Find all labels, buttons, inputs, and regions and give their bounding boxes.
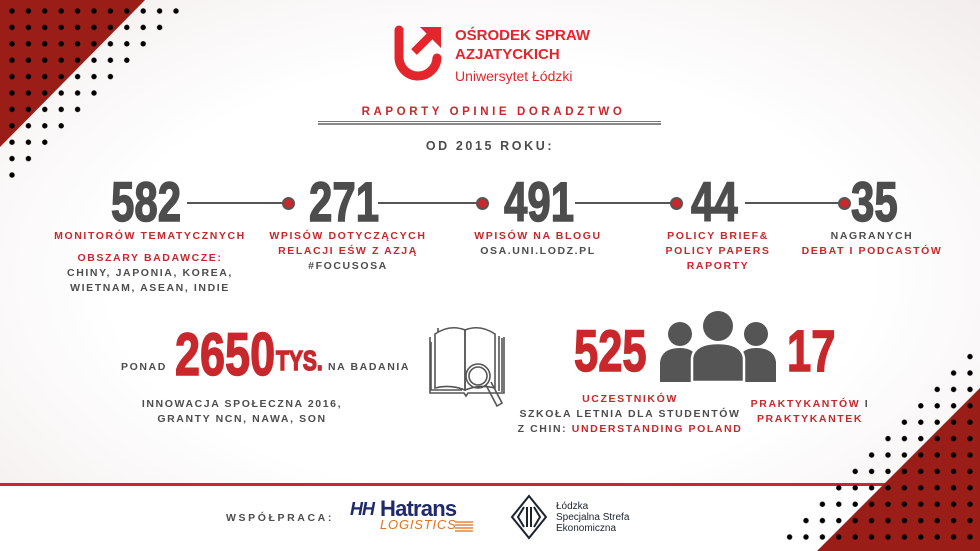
text: grants: GRANTY NCN, NAWA, SON (157, 413, 327, 425)
label 491: OSA.UNI.LODZ.PL (480, 245, 596, 257)
stat 491: 491 (504, 170, 574, 233)
logo text (455, 26, 590, 63)
label 44: POLICY BRIEF& (667, 230, 769, 242)
logo: Hatrans: LOGISTICS (380, 517, 457, 532)
icon: people (660, 311, 776, 382)
label 271: RELACJI EŚW Z AZJĄ (278, 245, 418, 257)
heading: since 2015: OD 2015 ROKU: (426, 139, 554, 153)
label 491 (474, 230, 602, 257)
text: grants: INNOWACJA SPOŁECZNA 2016, (142, 398, 342, 410)
stat 2650: 2650 (175, 321, 275, 388)
label 582: CHINY, JAPONIA, KOREA, (67, 267, 233, 279)
footer: cooperation: WSPÓŁPRACA: (226, 512, 334, 524)
label 35: DEBAT I PODCASTÓW (802, 245, 942, 257)
stat 582: 582 (111, 170, 181, 233)
logo: ŁSSE: Ekonomiczna (556, 523, 616, 534)
logo text: OŚRODEK SPRAW (455, 27, 590, 44)
logo: Hatrans: HH (350, 499, 374, 519)
logo: Uniwersytet Łódzki (455, 68, 572, 84)
logo text: AZJATYCKICH (455, 46, 560, 63)
label 44: RAPORTY (687, 260, 749, 272)
text: ponad: PONAD (121, 361, 167, 373)
label 525 (518, 392, 742, 435)
logo: ŁSSE: Łódzka (556, 501, 588, 512)
funding block: TYS. (276, 345, 323, 376)
logo: Hatrans: Hatrans (380, 496, 456, 521)
text: na badania: NA BADANIA (328, 361, 410, 373)
label 35 (802, 230, 942, 257)
label 271 (269, 230, 427, 272)
stat 17: 17 (787, 319, 835, 384)
label 271: #FOCUSOSA (308, 260, 388, 272)
logo: ŁSSE: Specjalna Strefa (556, 512, 629, 523)
label 582: WIETNAM, ASEAN, INDIE (70, 282, 230, 294)
label 582: MONITORÓW TEMATYCZNYCH OBSZARY BADAWCZE: (54, 230, 246, 264)
stat 271: 271 (309, 170, 379, 233)
label 271: WPISÓW DOTYCZĄCYCH (269, 230, 427, 242)
logo: Hatrans (350, 496, 473, 532)
logo: ŁSSE (510, 494, 630, 540)
label 525: SZKOŁA LETNIA DLA STUDENTÓW (519, 408, 741, 420)
label 525: UCZESTNIKÓW (582, 393, 678, 405)
label 17: PRAKTYKANTÓW I (751, 398, 869, 410)
label 491: WPISÓW NA BLOGU (474, 230, 602, 242)
subtitle: RAPORTY OPINIE DORADZTWO (362, 106, 625, 118)
label 35: NAGRANYCH (831, 230, 913, 242)
label 582 (54, 230, 246, 294)
label 17 (751, 398, 869, 425)
icon: logo mark (394, 26, 442, 80)
text: grants (142, 398, 342, 425)
icon: book with magnifier (429, 327, 505, 408)
stat 44: 44 (691, 170, 738, 233)
logo (394, 26, 590, 84)
label 17: PRAKTYKANTEK (757, 413, 863, 425)
funding block (121, 321, 410, 425)
label 525: Z CHIN: UNDERSTANDING POLAND (518, 423, 742, 435)
stat 35: 35 (851, 170, 898, 233)
label 44: POLICY PAPERS (665, 245, 770, 257)
stat 525: 525 (574, 319, 647, 384)
label 44 (665, 230, 770, 272)
